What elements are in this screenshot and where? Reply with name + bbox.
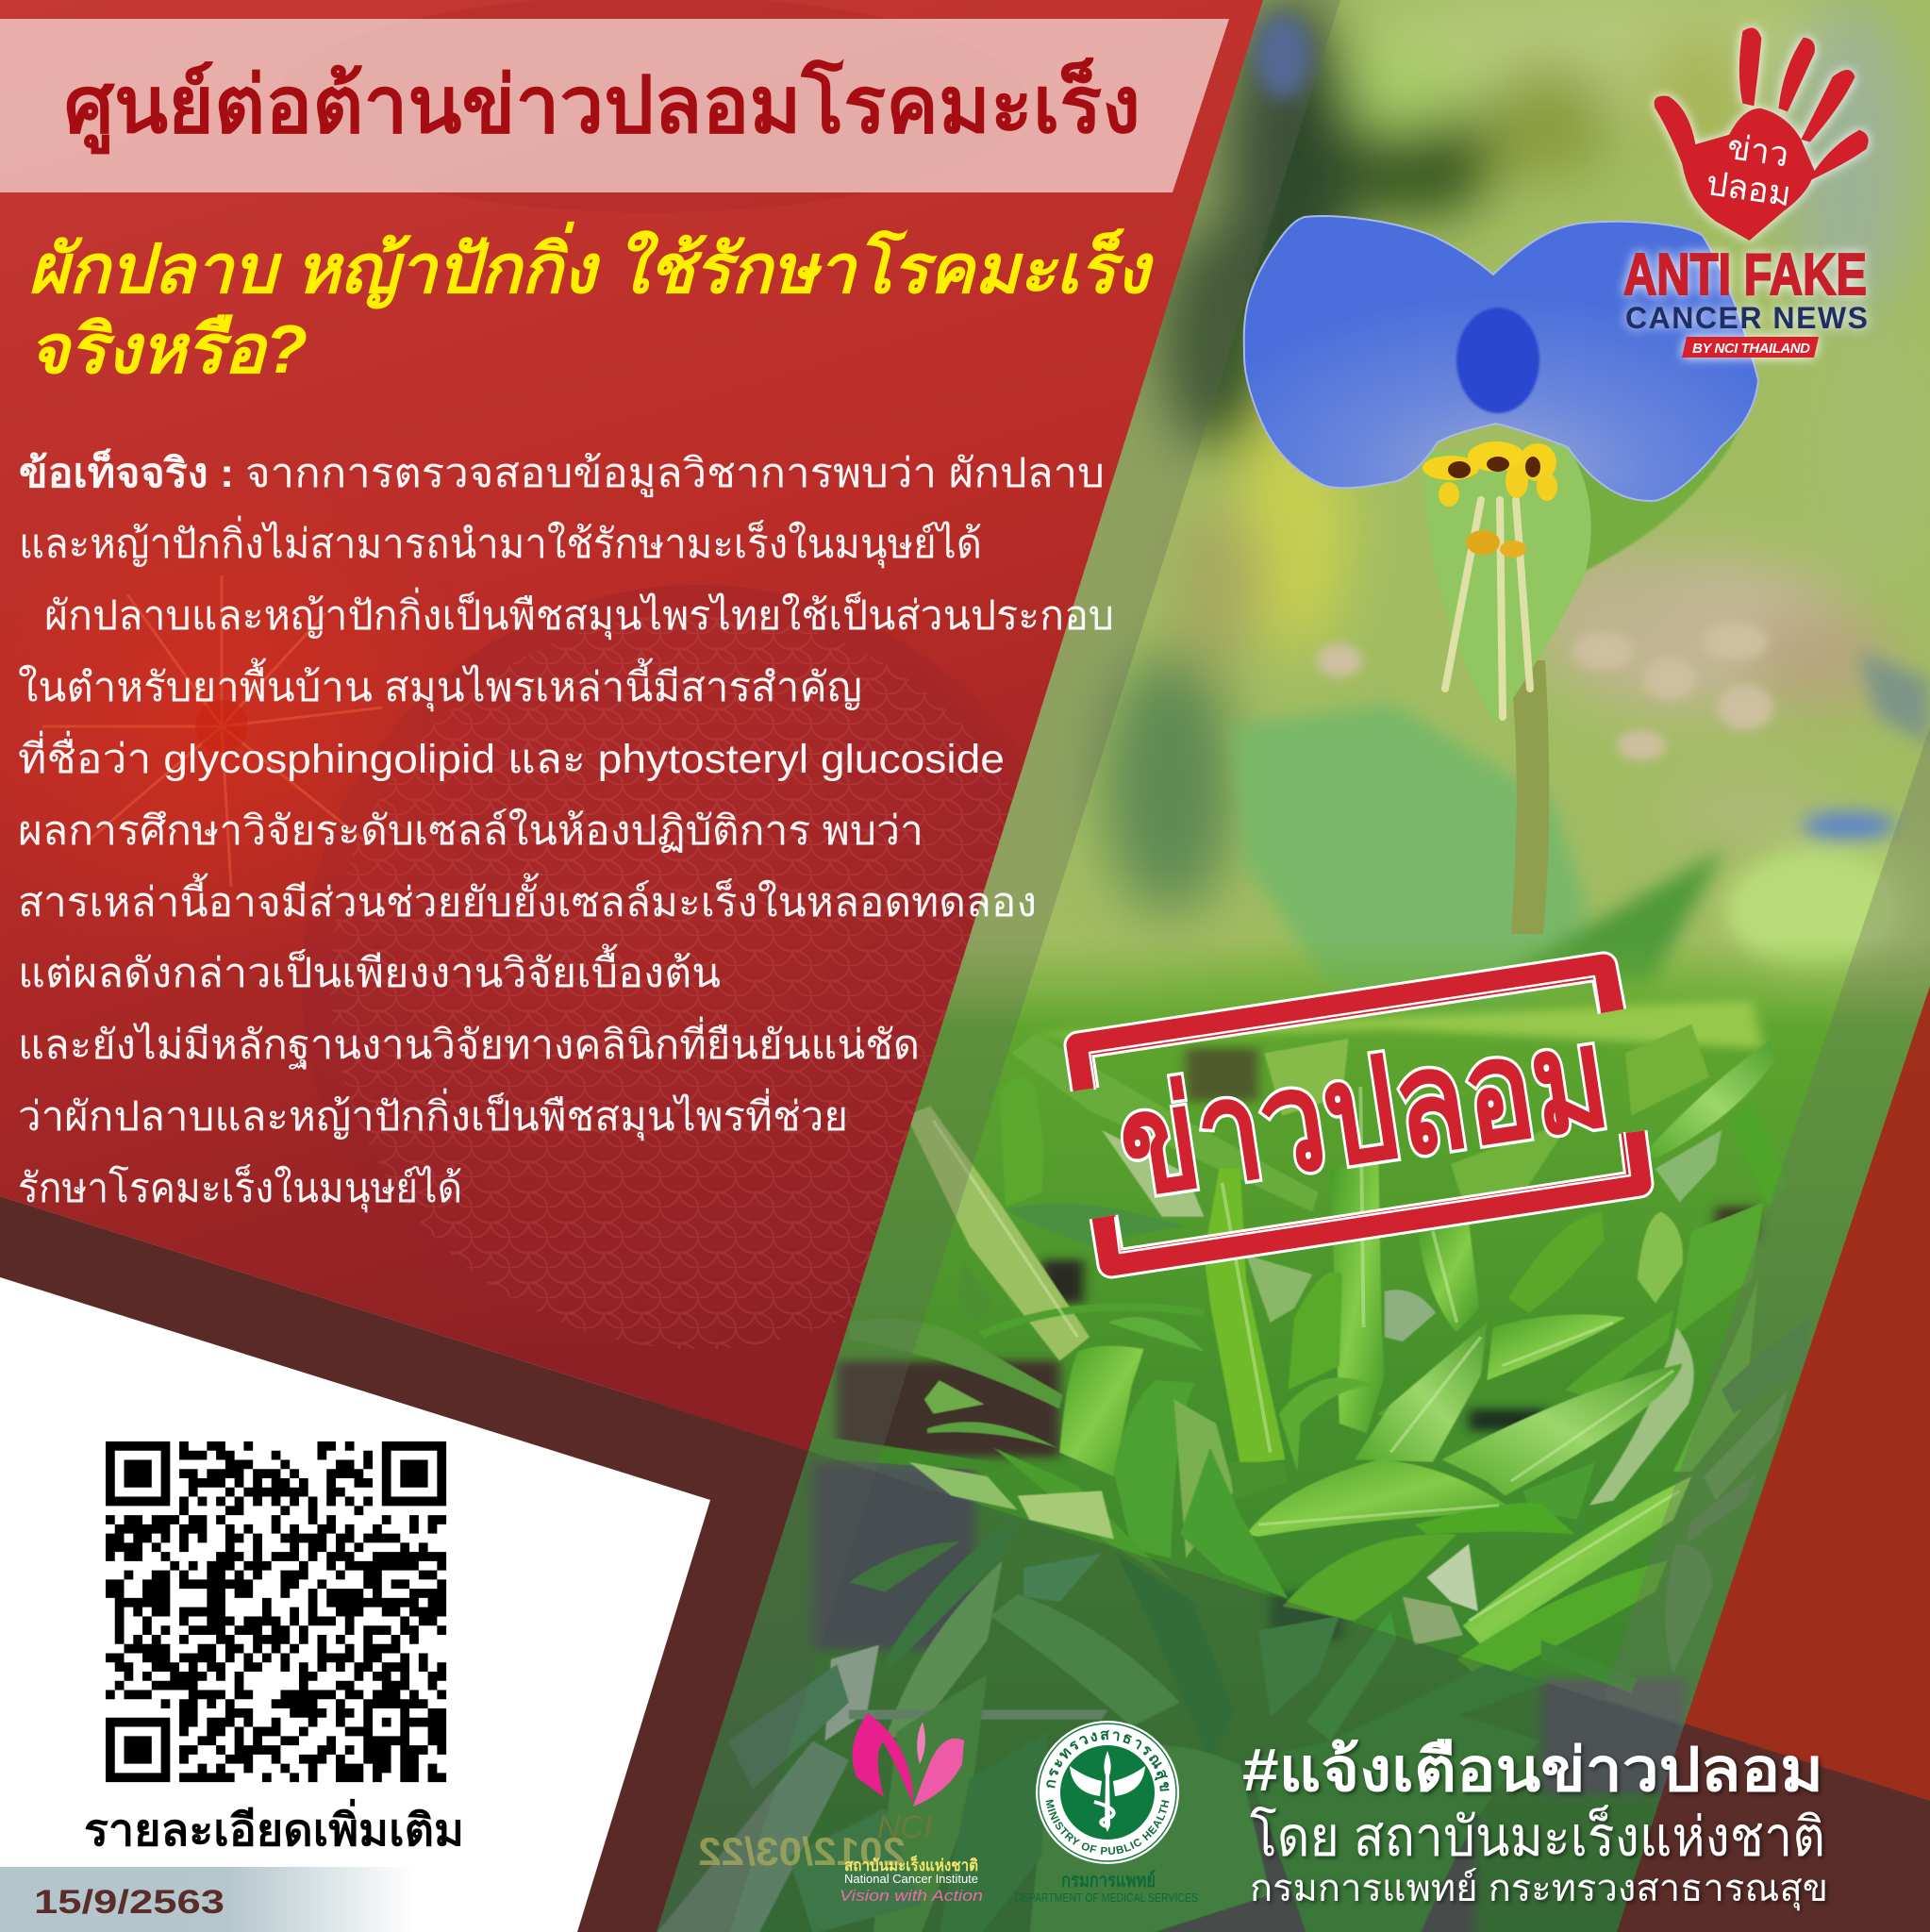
photo: blurred meadow background (651, 0, 1930, 1932)
logo: Anti Fake Cancer News (1623, 27, 1869, 358)
panel: white QR panel (0, 1277, 710, 1932)
flower: petals (1244, 216, 1758, 501)
panel: red main panel (0, 0, 1263, 1451)
flower: green side bract (1533, 377, 1758, 594)
texture: pale blood cell (418, 1, 531, 19)
text block: fact check body: และหญ้าปักกิ่งไม่สามารถนำมาใช้รักษามะเร็งในมนุษย์ได้ (19, 516, 982, 569)
seal caduceus (1070, 1751, 1145, 1832)
photo: tan speckles (1317, 623, 1773, 760)
institute Thai name: สถาบันมะเร็งแห่งชาติ (844, 1854, 978, 1874)
department English: DEPARTMENT OF MEDICAL SERVICES (1015, 1891, 1198, 1905)
text block: fact check body: รักษาโรคมะเร็งในมนุษย์ได้ (18, 1164, 462, 1213)
panel: lower right brown wedge (1617, 1724, 1930, 1932)
overlay: right translucent diagonal strip (1604, 726, 1930, 1724)
footer: campaign text (1242, 1736, 1828, 1911)
text block: fact check body: ผักปลาบและหญ้าปักกิ่งเป็นพืชสมุนไพรไทยใช้เป็นส่วนประกอบ (44, 588, 1114, 641)
photo: grass leaves (644, 938, 1930, 1932)
wordmark: Cancer News: CANCER NEWS (1625, 301, 1868, 335)
seal Thai arc text: กระทรวงสาธารณสุข (1046, 1730, 1170, 1791)
seal English arc text: MINISTRY OF PUBLIC HEALTH (1045, 1800, 1170, 1855)
title: ศูนย์ต่อต้านข่าวปลอมโรคมะเร็ง (64, 57, 1140, 155)
wordmark: Anti Fake: ANTI FAKE (1623, 242, 1867, 308)
flower: dark blue centre (1456, 308, 1539, 413)
text block: fact check body: สารเหล่านี้อาจมีส่วนช่วยยับยั้งเซลล์มะเร็งในหลอดทดลอง (18, 873, 1037, 925)
overlay: grey translucent diagonal strip (657, 0, 1340, 1932)
text block: fact check body: แต่ผลดังกล่าวเป็นเพียงงานวิจัยเบื้องต้น (18, 943, 721, 996)
logo: Ministry of Public Health (1015, 1721, 1198, 1905)
department Thai: กรมการแพทย์ (1061, 1870, 1156, 1891)
date bar (0, 1867, 415, 1932)
QR code (106, 1441, 446, 1782)
icon: pink heart wings (853, 1713, 964, 1807)
text block: fact check body: ในตำหรับยาพื้นบ้าน สมุนไพรเหล่านี้มีสารสำคัญ (18, 658, 862, 712)
panel: dark brown diagonal band (0, 1196, 808, 1932)
badge: by NCI Thailand: BY NCI THAILAND (1692, 341, 1810, 357)
stamp: bottom bracket (1104, 1132, 1639, 1264)
date bar: 15/9/2563 (34, 1884, 225, 1921)
badge: by NCI Thailand (1682, 337, 1819, 358)
stamp: fake news (1078, 966, 1639, 1264)
photo: flower stem (1509, 660, 1549, 934)
text block: fact check body: และยังไม่มีหลักฐานงานวิจัยทางคลินิกที่ยืนยันแน่ชัด (18, 1017, 920, 1069)
flower: green spathe (1423, 443, 1591, 724)
hand label: ปลอม (1704, 163, 1793, 213)
photo: background leaves (1232, 14, 1930, 1023)
watermark: mirrored photo date: 2012/03/22 (698, 1829, 906, 1874)
logo: National Cancer Institute (840, 1713, 983, 1905)
NCI script: NCI (877, 1809, 933, 1845)
QR caption: รายละเอียดเพิ่มเติม (84, 1798, 464, 1855)
text block: fact check body: ข้อเท็จจริง : (19, 448, 234, 496)
heading: yellow question: จริงหรือ? (28, 312, 308, 388)
flower: stamens (1445, 500, 1530, 717)
icon: red hand print (1655, 27, 1869, 241)
text block: fact check body: ผลการศึกษาวิจัยระดับเซลล์ในห้องปฏิบัติการ พบว่า (18, 808, 923, 854)
text block: fact check body: ว่าผักปลาบและหญ้าปักกิ่งเป็นพืชสมุนไพรที่ช่วย (18, 1089, 848, 1141)
flower: yellow anthers (1423, 441, 1557, 558)
footer: campaign text: #แจ้งเตือนข่าวปลอม (1242, 1736, 1823, 1804)
photo: blue flower (1244, 216, 1758, 724)
stamp: text: ข่าวปลอม (1109, 997, 1618, 1226)
banner: title background (0, 19, 1229, 192)
text block: fact check body: จากการตรวจสอบข้อมูลวิชาการพบว่า ผักปลาบ (245, 451, 1105, 498)
overlay: lower translucent band (657, 1451, 1930, 1932)
institute English name: National Cancer Institute (844, 1872, 978, 1886)
heading: yellow question (28, 221, 1155, 388)
text block: fact check body: ที่ชื่อว่า glycosphingolipid และ phytosteryl glucoside (18, 731, 1005, 782)
footer: campaign text: โดย สถาบันมะเร็งแห่งชาติ (1250, 1805, 1825, 1868)
stamp: top bracket (1078, 966, 1612, 1090)
panel: right red wedge (1685, 986, 1930, 1801)
texture: spiked virus glow (42, 575, 424, 908)
heading: yellow question: ผักปลาบ หญ้าปักกิ่ง ใช้รักษาโรคมะเร็ง (28, 221, 1155, 309)
footer: campaign text: กรมการแพทย์ กระทรวงสาธารณสุข (1250, 1867, 1828, 1911)
text block: fact check body (18, 448, 1114, 1213)
texture: cancer cell (314, 585, 1019, 1349)
hand label: ข่าว (1725, 127, 1791, 174)
seal disc (1036, 1721, 1179, 1864)
slogan: Vision with Action (840, 1887, 983, 1905)
hand label (1704, 127, 1793, 213)
